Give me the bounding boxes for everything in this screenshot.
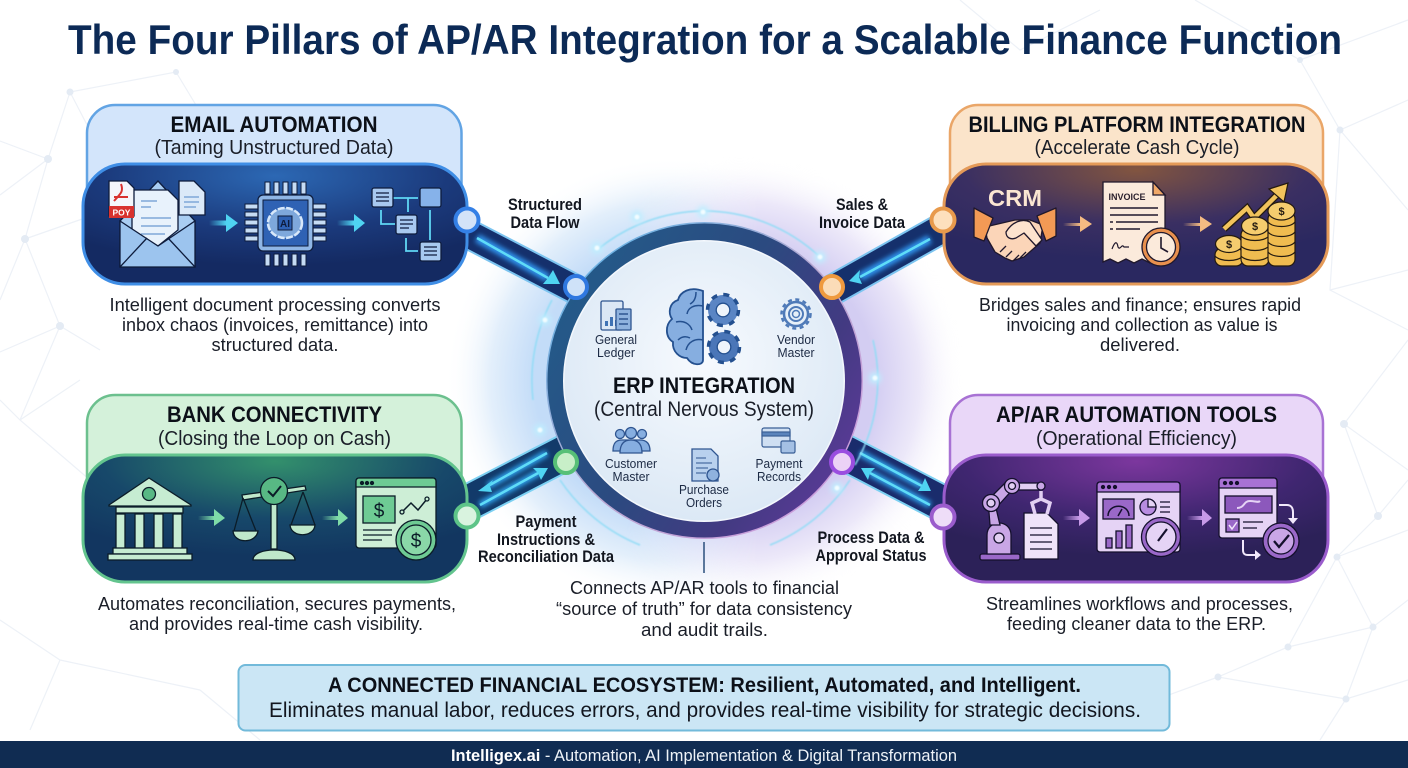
subheading: taming unstructured data: (Taming Unstructured Data): [154, 136, 394, 159]
label: payment records: [756, 456, 803, 484]
icon: structured data flow: [372, 188, 441, 261]
heading: billing platform integration: BILLING PLATFORM INTEGRATION: [968, 112, 1306, 137]
subheading: operational efficiency: (Operational Efficiency): [1036, 427, 1237, 450]
label: sales and invoice data: Invoice Data: [819, 214, 906, 232]
icon: envelope with documents: POY: [113, 208, 131, 218]
heading: bank connectivity: BANK CONNECTIVITY: [167, 402, 382, 427]
description: ERP integration: Connects AP/AR tools to financial: [570, 577, 839, 598]
description: email automation: [110, 294, 440, 355]
description: bank connectivity: [98, 593, 456, 634]
icon: vendor gear: [782, 300, 810, 328]
panel: ERP integration hub: [532, 206, 881, 545]
arrow: [1183, 216, 1212, 232]
description: ERP integration: [556, 577, 853, 640]
description: email automation: Intelligent document processing converts: [110, 294, 440, 315]
heading: email automation: EMAIL AUTOMATION: [170, 112, 378, 137]
icon: envelope with documents: [109, 181, 205, 267]
description: email automation: structured data.: [212, 334, 338, 355]
label: general ledger: [595, 332, 637, 360]
icon: bank building: [108, 478, 192, 560]
panel: email automation: [83, 105, 478, 284]
callout: connected financial ecosystem: A CONNECTED FINANCIAL ECOSYSTEM: Resilient, Automated, and Intelligent.: [328, 673, 1081, 697]
callout: connected financial ecosystem: [238, 665, 1170, 730]
label: process data and approval status: [816, 529, 926, 565]
arrow: [337, 214, 365, 232]
icon: AI chip: AI: [280, 219, 290, 230]
label: purchase orders: Orders: [686, 495, 722, 510]
connector node: [456, 208, 478, 232]
icon: growing coins: $: [1226, 239, 1232, 251]
label: sales and invoice data: [819, 196, 906, 232]
label: structured data flow: [508, 196, 582, 232]
description: billing platform: Bridges sales and finance; ensures rapid: [979, 294, 1301, 315]
description: billing platform: delivered.: [1100, 334, 1180, 355]
description: ERP integration: and audit trails.: [641, 619, 768, 640]
arrow: [322, 509, 348, 526]
panel: bank connectivity: [83, 395, 478, 582]
label: customer master: Master: [612, 469, 650, 484]
hub node: blue: [565, 276, 587, 298]
connector node: [456, 504, 478, 528]
hub node: green: [555, 451, 577, 473]
description: billing platform: [979, 294, 1301, 355]
icon: cash dashboard: $: [374, 501, 385, 522]
arrow: [1063, 509, 1090, 526]
dark icon band: [83, 455, 467, 582]
description: email automation: inbox chaos (invoices, remittance) into: [122, 314, 428, 335]
connector: billing to ERP: [820, 224, 950, 297]
label: vendor master: [777, 332, 816, 360]
arrow: [1063, 216, 1092, 232]
label: CRM: CRM: [988, 185, 1042, 211]
connector node: [932, 506, 954, 528]
label: purchase orders: Purchase: [679, 482, 729, 497]
description: AP/AR automation: Streamlines workflows and processes,: [986, 593, 1293, 614]
icon: payment records: [762, 428, 795, 453]
description: bank connectivity: Automates reconciliation, secures payments,: [98, 593, 456, 614]
connector: email to ERP: [457, 228, 590, 297]
connector: AP/AR tools to ERP: [830, 445, 955, 510]
subheading: closing the loop on cash: (Closing the Loop on Cash): [158, 427, 391, 450]
icon: customer master: [613, 428, 650, 453]
label: structured data flow: Data Flow: [510, 214, 580, 232]
icon: AI chip: [245, 182, 326, 266]
label: sales and invoice data: Sales &: [836, 196, 888, 214]
icon: balance scales: [233, 478, 315, 560]
label: customer master: Customer: [605, 456, 658, 471]
dark icon band: [83, 164, 467, 284]
connector: bank to ERP: [458, 445, 580, 508]
hub node: orange: [821, 276, 843, 298]
description: billing platform: invoicing and collection as value is: [1006, 314, 1278, 335]
dark icon band: [944, 455, 1328, 582]
label: process data and approval status: Approval Status: [816, 547, 926, 565]
label: payment instructions and reconciliation data: Reconciliation Data: [478, 548, 615, 566]
subheading: central nervous system: (Central Nervous System): [594, 398, 814, 421]
heading: AP/AR automation tools: AP/AR AUTOMATION TOOLS: [996, 402, 1277, 427]
label: payment instructions and reconciliation data: Instructions &: [497, 531, 595, 549]
icon: cash dashboard: $: [411, 531, 422, 552]
label: payment records: Payment: [756, 456, 803, 471]
icon: growing coins: [1215, 183, 1295, 266]
icon: workflow window with check: [1219, 478, 1299, 560]
arrow: [209, 214, 238, 232]
description: bank connectivity: and provides real-time cash visibility.: [129, 613, 423, 634]
label: general ledger: General: [595, 332, 637, 347]
icon: KPI dashboard with gauge: [1097, 482, 1180, 556]
panel: billing platform integration: [932, 105, 1328, 284]
label: payment instructions and reconciliation data: Payment: [516, 513, 577, 531]
dark icon band: [944, 164, 1328, 284]
callout: connected financial ecosystem: Eliminates manual labor, reduces errors, and provides real-time visibility for strategic decisions.: [269, 698, 1141, 722]
hub node: purple: [831, 451, 853, 473]
heading: ERP integration: ERP INTEGRATION: [613, 373, 795, 398]
label: payment instructions and reconciliation data: [478, 513, 615, 566]
label: customer master: [605, 456, 658, 484]
connector node: [932, 208, 954, 232]
icon: cash dashboard: [356, 478, 436, 560]
icon: robot arm with document: [980, 478, 1058, 560]
arrow: [198, 509, 225, 526]
icon: handshake: [974, 208, 1056, 261]
icon: invoice with clock: [1103, 182, 1180, 266]
icon: growing coins: $: [1278, 206, 1285, 218]
footer bar: Intelligex.ai - Automation, AI Implementation & Digital Transformation: [451, 746, 957, 765]
icon: growing coins: $: [1252, 221, 1258, 233]
icon: invoice with clock: INVOICE: [1108, 192, 1146, 202]
label: payment records: Records: [757, 469, 801, 484]
icon: purchase orders: [692, 449, 719, 481]
footer bar: [0, 741, 1408, 768]
label: vendor master: Vendor: [777, 332, 816, 347]
label: vendor master: Master: [778, 345, 815, 360]
description: AP/AR automation: feeding cleaner data to the ERP.: [1007, 613, 1266, 634]
icon: general ledger: [601, 301, 631, 330]
description: AP/AR automation: [986, 593, 1293, 634]
arrow: [1187, 509, 1212, 526]
label: process data and approval status: Process Data &: [818, 529, 925, 547]
label: general ledger: Ledger: [597, 345, 636, 360]
label: purchase orders: [679, 482, 729, 510]
panel: AP/AR automation tools: [932, 395, 1328, 582]
icon: brain and gears: [667, 289, 740, 364]
label: structured data flow: Structured: [508, 196, 582, 214]
subheading: accelerate cash cycle: (Accelerate Cash Cycle): [1034, 136, 1240, 159]
description: ERP integration: “source of truth” for data consistency: [556, 598, 853, 619]
